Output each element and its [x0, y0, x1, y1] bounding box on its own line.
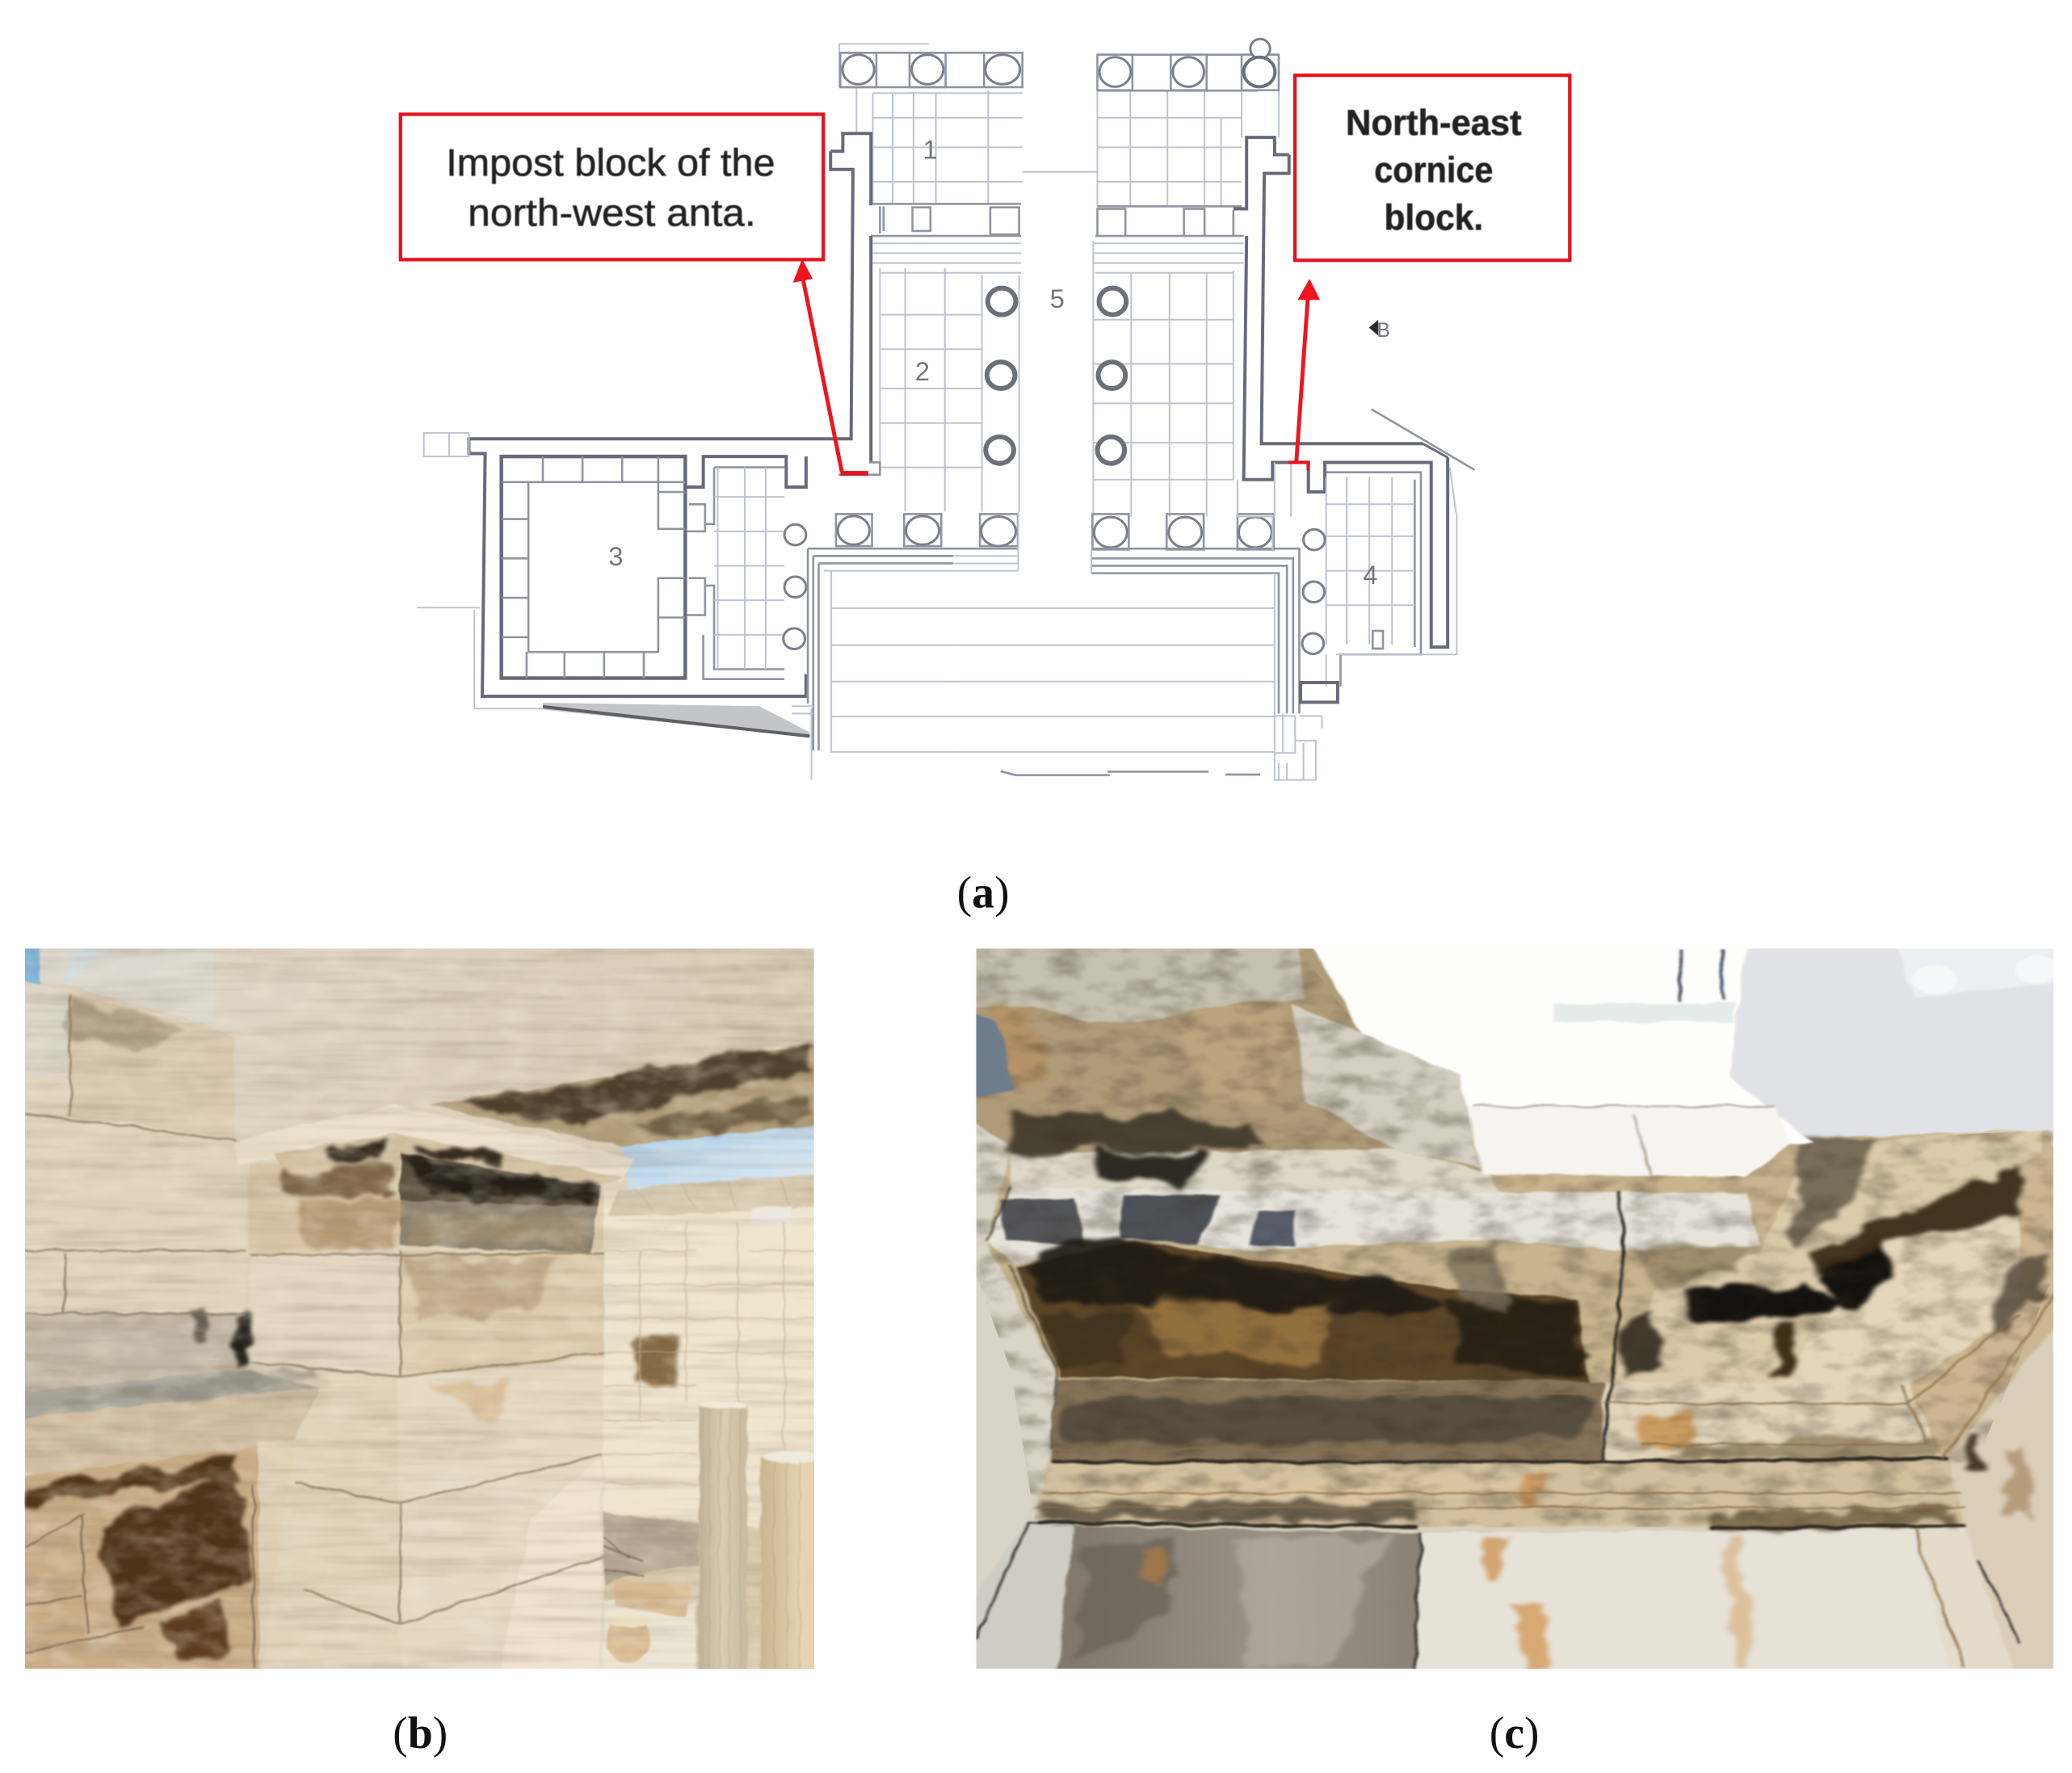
east wing	[1097, 55, 1279, 206]
cracks and joints	[1603, 1192, 1624, 1461]
lower left	[1, 1442, 295, 1692]
callout: impost block: Impost block of the	[446, 142, 775, 185]
left wall	[948, 1103, 1057, 1634]
porch	[685, 456, 806, 487]
stone banding	[25, 948, 814, 1669]
section marker B	[1369, 320, 1390, 342]
arrow to cornice block label	[1297, 279, 1320, 462]
caption c: (c)	[1490, 1708, 1539, 1758]
stains	[460, 1044, 809, 1124]
right return	[1908, 1129, 2072, 1454]
callout: impost block: north-west anta.	[468, 192, 756, 235]
callout: cornice block: block.	[1384, 199, 1483, 238]
cornice base	[987, 1129, 2072, 1461]
beam	[215, 921, 841, 1141]
right cornice	[1610, 1129, 2048, 1384]
capital	[248, 1151, 400, 1255]
stone mottling	[25, 948, 814, 1669]
stone mottling dark	[977, 948, 2053, 1669]
caption a: (a)	[957, 868, 1010, 918]
panel c: photograph of cornice block	[948, 921, 2072, 1692]
sky window	[622, 1122, 841, 1190]
left upper blocks	[25, 981, 27, 982]
dark squares	[1001, 1199, 1085, 1246]
panel b: photograph of anta impost block	[24, 948, 814, 1669]
mouldings	[1050, 1379, 1603, 1461]
plan: western half	[417, 44, 953, 780]
room numbers: 4	[1363, 560, 1377, 590]
upper back wall	[39, 948, 216, 1027]
bottom columns	[836, 514, 941, 546]
soffit	[428, 1040, 841, 1146]
ramp shadow	[543, 703, 809, 737]
block joints	[25, 994, 603, 1624]
arrow to impost block label	[793, 259, 842, 472]
callout: cornice block	[1295, 75, 1570, 260]
brown panel	[1019, 1241, 1589, 1381]
plan: eastern half	[953, 39, 1474, 780]
section marker B: B	[1376, 320, 1390, 342]
lower slabs	[1053, 1526, 1421, 1692]
callout: cornice block: cornice	[1374, 151, 1493, 191]
callout: impost block	[401, 114, 823, 259]
callout: cornice block: North-east	[1346, 103, 1522, 143]
panel a: floor plan	[401, 39, 1570, 780]
recess	[25, 1312, 247, 1392]
room 3	[502, 456, 685, 678]
red marker: impost block	[840, 471, 868, 476]
dark stains	[1019, 1238, 1445, 1318]
bright opening	[948, 921, 2058, 1178]
caption b: (b)	[393, 1708, 448, 1758]
white band	[987, 1187, 1760, 1265]
room numbers: 3	[608, 541, 623, 571]
white marble block	[1729, 921, 2072, 1144]
stylobate steps	[808, 548, 953, 750]
room numbers: 5	[1050, 284, 1065, 313]
top-left rock	[948, 921, 1481, 1173]
red marker: cornice block	[1288, 462, 1308, 470]
back wall right	[603, 1173, 841, 1537]
room numbers: 2	[915, 356, 930, 386]
pier left and right faces	[248, 1153, 603, 1692]
ground and steps	[603, 1513, 841, 1692]
sky corner	[25, 948, 42, 985]
columns in courtyard	[699, 1401, 843, 1699]
room numbers: 1	[923, 134, 938, 164]
room numbers	[608, 134, 1377, 590]
ledge top	[1, 1369, 320, 1420]
